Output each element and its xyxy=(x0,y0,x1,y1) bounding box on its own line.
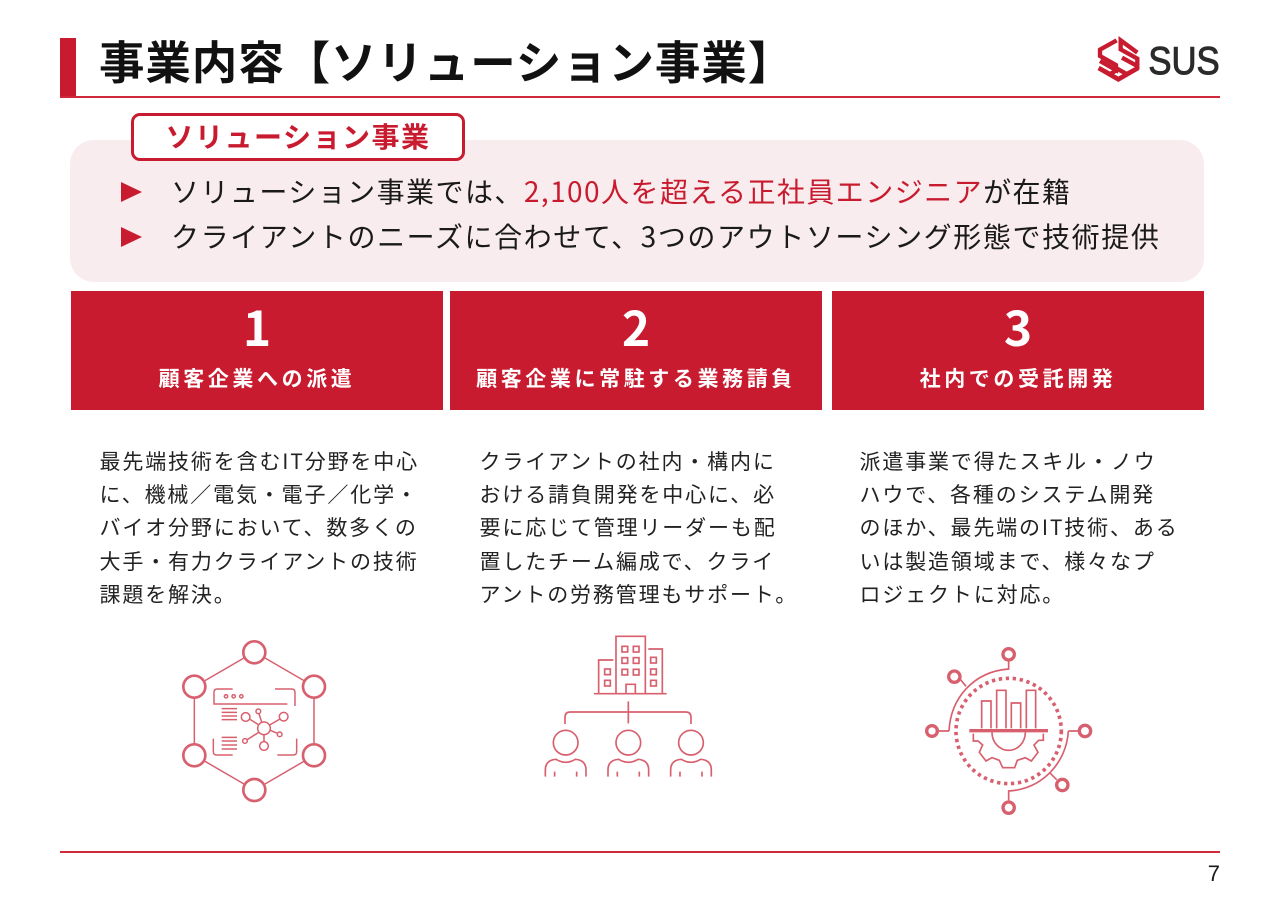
text block 3: 派遣事業で得たスキル・ノウ xyxy=(860,446,1157,476)
text block 2: 置したチーム編成で、クライ xyxy=(480,546,775,576)
text block 1: に、機械／電気・電子／化学・ xyxy=(100,479,419,509)
section label xyxy=(131,113,465,161)
text block 3: ロジェクトに対応。 xyxy=(860,579,1065,609)
panel: summary band xyxy=(70,140,1204,282)
page number: 7 xyxy=(1208,861,1220,886)
header rule xyxy=(60,96,1220,98)
heading 2: 顧客企業に常駐する業務請負 xyxy=(476,363,796,393)
logo: SUS: SUS xyxy=(1148,40,1220,83)
text block 2: おける請負開発を中心に、必 xyxy=(480,479,776,509)
summary line 2: クライアントのニーズに合わせて、3つのアウトソーシング形態で技術提供 xyxy=(171,216,1160,256)
text block 2: 要に応じて管理リーダーも配 xyxy=(480,512,777,542)
text block 2: アントの労務管理もサポート。 xyxy=(480,579,798,609)
number 1: 1 xyxy=(243,290,271,360)
footer rule xyxy=(60,851,1220,853)
number 3: 3 xyxy=(1004,290,1032,360)
text block 2 xyxy=(480,446,798,609)
bullet marker 2 xyxy=(121,227,142,247)
panel: header 3 xyxy=(832,291,1204,410)
text block 3: のほか、最先端のIT技術、ある xyxy=(860,512,1179,542)
text block 3 xyxy=(860,446,1179,609)
number 2: 2 xyxy=(622,290,650,360)
panel: header 1 xyxy=(71,291,443,410)
text block 1: 大手・有力クライアントの技術 xyxy=(100,546,419,576)
heading 3: 社内での受託開発 xyxy=(920,363,1116,393)
title: 事業内容【ソリューション事業】 xyxy=(99,27,794,93)
text block 1 xyxy=(100,446,419,609)
title accent bar xyxy=(60,38,76,97)
icon: building and team xyxy=(545,636,711,777)
icon: hexagon network xyxy=(183,641,325,801)
text block 1: 課題を解決。 xyxy=(100,579,237,609)
text block 1: 最先端技術を含むIT分野を中心 xyxy=(100,446,419,476)
panel: header 2 xyxy=(450,291,822,410)
text block 3: いは製造領域まで、様々なプ xyxy=(860,546,1156,576)
text block 1: バイオ分野において、数多くの xyxy=(100,512,418,542)
bullet marker 1 xyxy=(121,182,142,202)
text block 3: ハウで、各種のシステム開発 xyxy=(860,479,1155,509)
text block 2: クライアントの社内・構内に xyxy=(480,446,776,476)
heading 1: 顧客企業への派遣 xyxy=(159,363,355,393)
summary line 1: ソリューション事業では、2,100人を超える正社員エンジニアが在籍 xyxy=(171,171,1071,211)
section label: ソリューション事業 xyxy=(166,116,430,156)
icon: data and gear circuit xyxy=(927,649,1091,813)
